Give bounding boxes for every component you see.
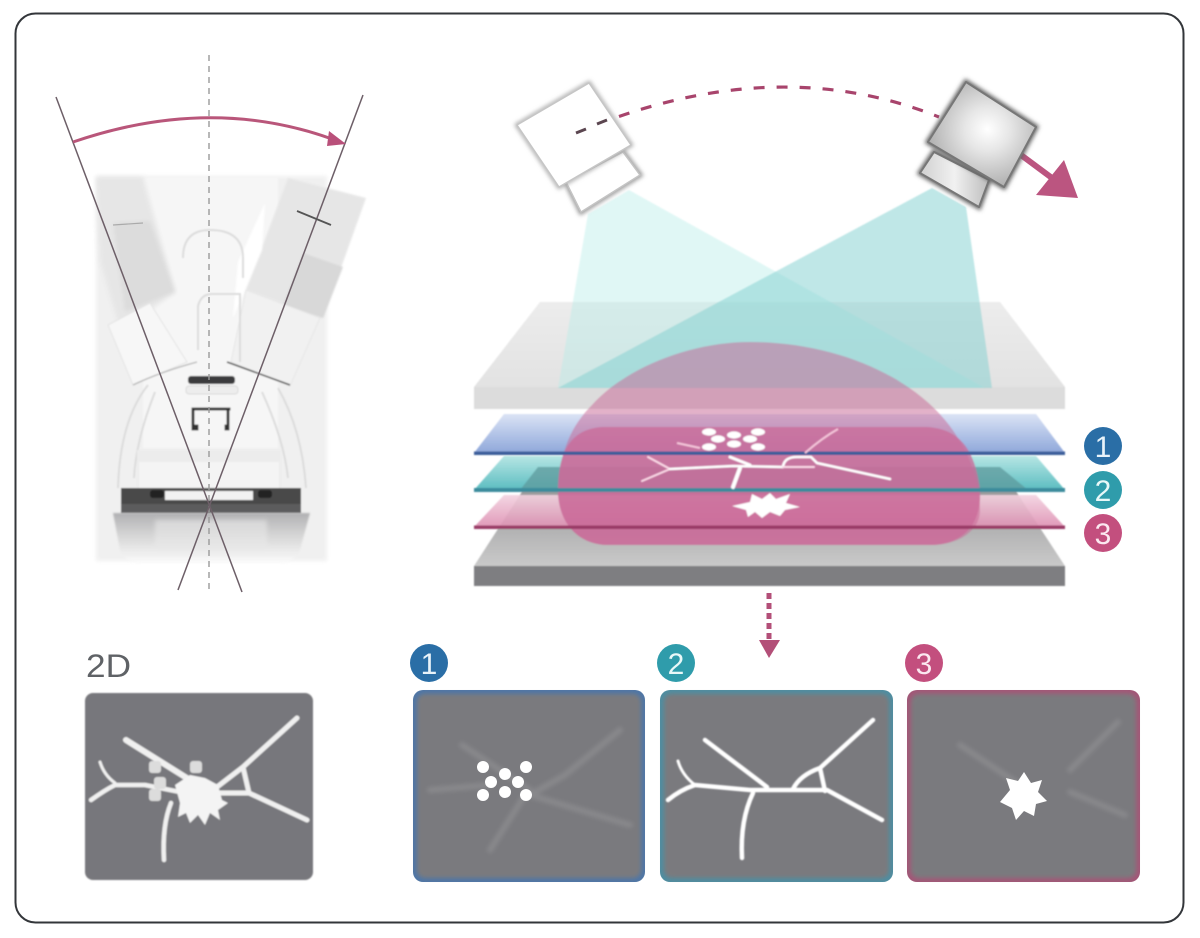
layer line 1 — [474, 452, 1065, 455]
panel: 2D image — [85, 693, 313, 880]
faint ducts — [430, 730, 630, 850]
calcification dots — [477, 761, 532, 801]
x-ray tube end position — [920, 82, 1036, 207]
layer line 2 — [474, 488, 1065, 492]
machine body — [96, 176, 366, 563]
dashed path of x-ray tube — [576, 87, 939, 133]
spiculated mass in layer 3 — [732, 493, 800, 518]
mammography machine with tilt angle — [56, 55, 366, 592]
badge 1 — [410, 644, 448, 682]
calcification dots in layer 1 — [702, 428, 765, 451]
breast body — [558, 427, 980, 545]
layered breast diagram — [474, 188, 1065, 586]
badge 1: 1 — [421, 648, 437, 681]
badge 2 legend: 2 — [1095, 475, 1111, 508]
panel: slice 1 calcifications — [413, 690, 645, 882]
compression fittings — [192, 408, 230, 430]
badge 1 legend: 1 — [1095, 431, 1111, 464]
top compression plate — [474, 302, 1065, 409]
ducts in layer 2 — [642, 457, 890, 487]
arrow down to slices — [759, 593, 780, 658]
x-ray beam right — [558, 188, 992, 388]
tilt line right — [178, 95, 363, 590]
x-ray beam left — [558, 190, 985, 388]
pink layer back — [474, 495, 1065, 527]
center dashed axis — [208, 55, 210, 590]
x-ray tube start position — [517, 83, 640, 212]
overlapping ducts — [91, 718, 307, 860]
arm tick marks — [297, 211, 331, 225]
badge 2: 2 — [668, 648, 684, 681]
panel: slice 3 mass — [907, 690, 1140, 882]
heading: 2D: 2D — [86, 648, 131, 684]
faint ducts in layer 1 — [677, 429, 838, 453]
badge 2 — [657, 644, 695, 682]
badge 3 — [905, 644, 943, 682]
panel: slice 2 ducts — [660, 690, 893, 882]
dark handle bar — [188, 376, 235, 384]
overlapping microcalcifications — [149, 761, 202, 801]
dark detector plate — [121, 488, 301, 512]
clear ducts — [668, 720, 882, 858]
layer line 3 — [474, 526, 1065, 529]
badge 3 legend: 3 — [1095, 518, 1111, 551]
breast dome — [558, 342, 980, 545]
movement arrow — [1021, 155, 1078, 198]
faint ducts — [960, 722, 1125, 815]
badge 3: 3 — [916, 648, 932, 681]
bottom plate — [474, 467, 1065, 586]
blue layer back — [474, 414, 1065, 453]
badge 3 legend — [1084, 514, 1122, 552]
teal layer back — [474, 456, 1065, 490]
overlapping mass — [175, 775, 228, 825]
badge 1 legend — [1084, 427, 1122, 465]
tilt arc arrow — [73, 118, 346, 146]
badge 2 legend — [1084, 471, 1122, 509]
spiculated mass — [1000, 772, 1047, 820]
tilt line left — [56, 97, 242, 592]
